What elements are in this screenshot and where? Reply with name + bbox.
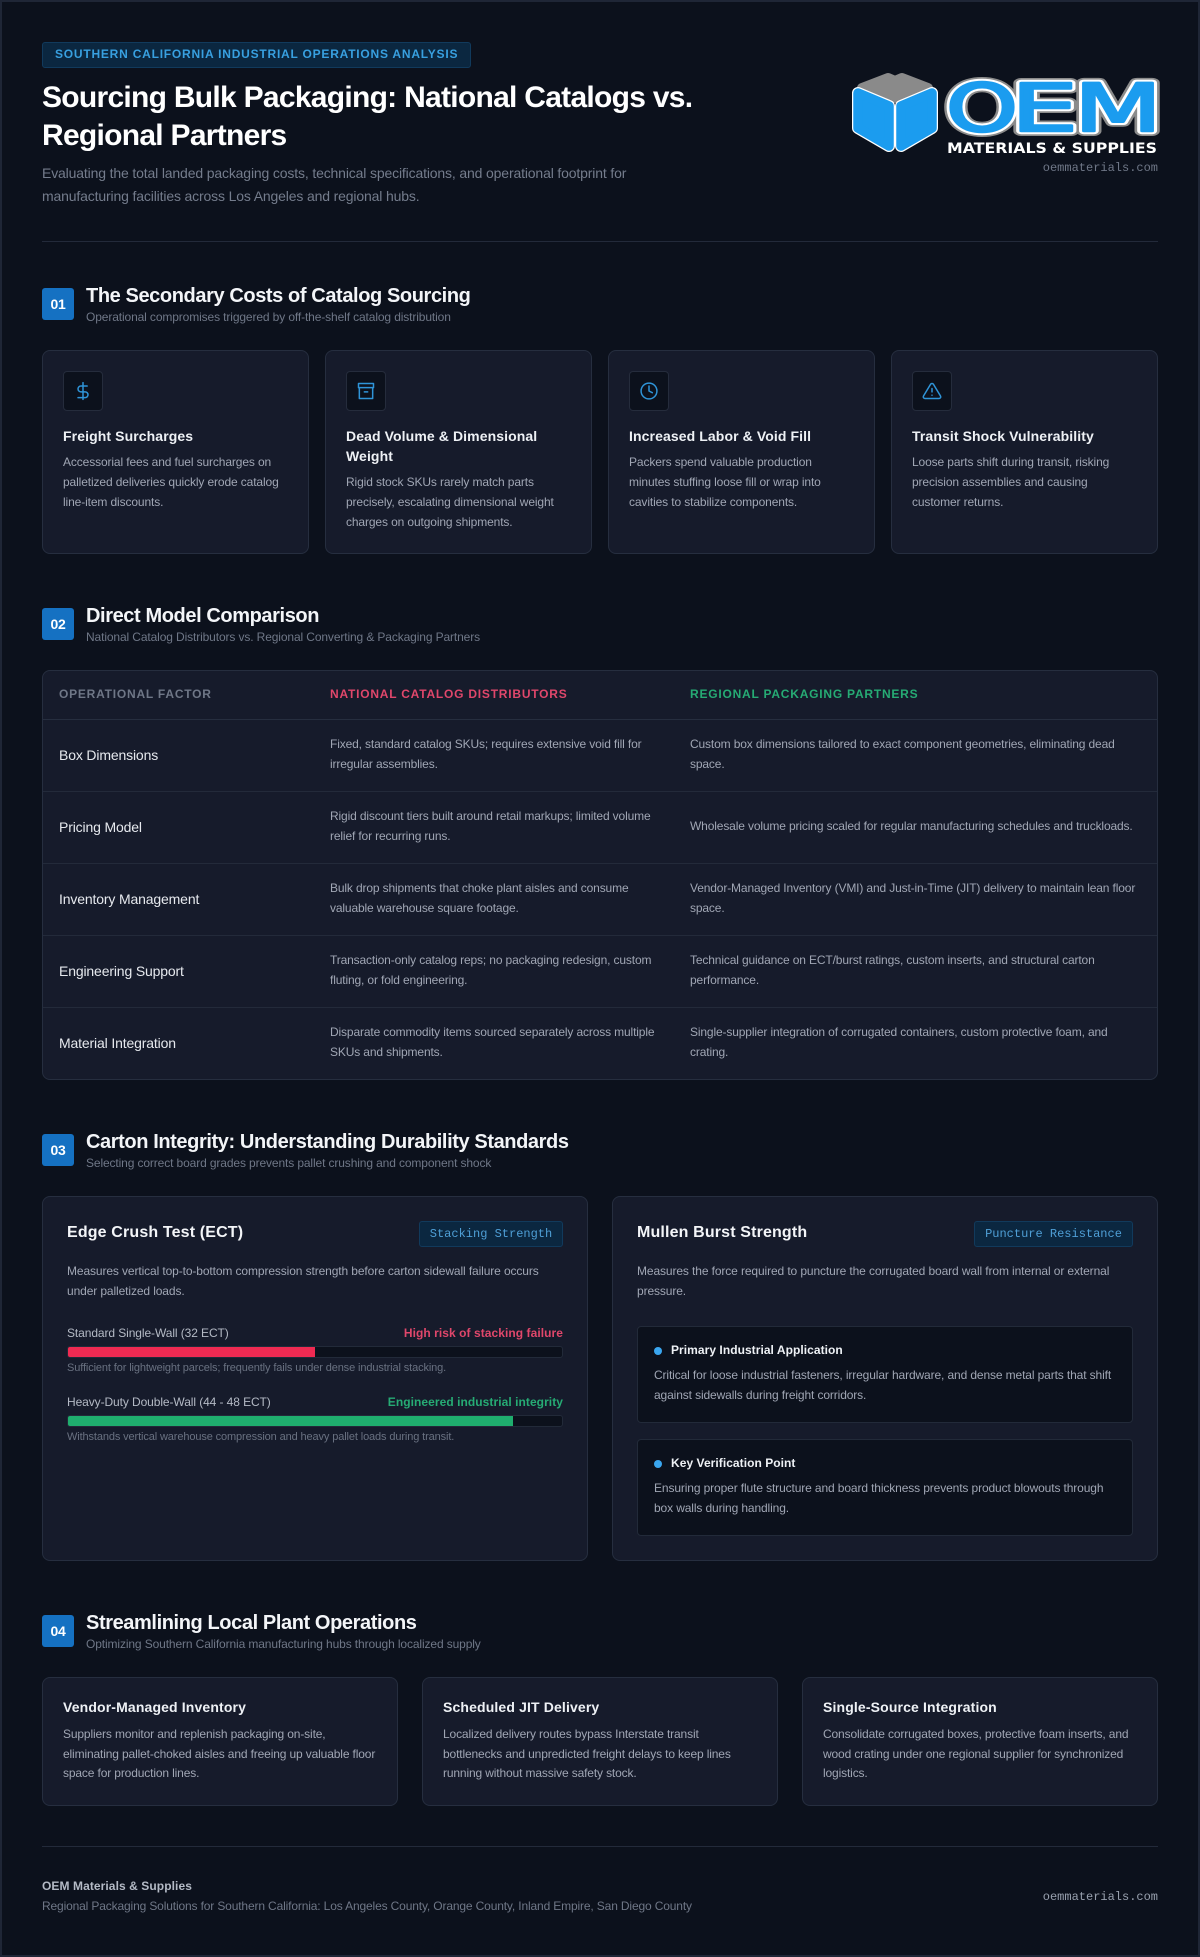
tag: stacking strength: Stacking Strength [430,1227,552,1241]
panel: mullen burst strength: Measures the force required to puncture the corrugated board wall from internal or external [637,1264,1109,1278]
row: material integration: Disparate commodity items sourced separately across multiple [330,1025,654,1039]
row: engineering support: Engineering Support [59,963,184,979]
callout: key verification point [637,1439,1133,1536]
logo wordmark [946,70,1162,147]
section 04 heading [42,1612,481,1651]
panel: edge crush test: under palletized loads. [67,1284,185,1298]
subtitle: Evaluating the total landed packaging costs, technical specifications, and operational footprint for [42,165,626,181]
row: material integration: Single-supplier integration of corrugated containers, custom protective foam, and [690,1025,1108,1039]
panel: transit shock: customer returns. [912,495,1003,509]
footer company: OEM Materials & Supplies [42,1879,192,1893]
panel: dead volume [325,350,592,554]
callout: primary application: Critical for loose industrial fasteners, irregular hardware, and dense metal parts that shift [654,1368,1111,1382]
footer url: oemmaterials.com [1043,1890,1158,1904]
metric: standard single-wall: High risk of stacking failure [404,1326,563,1340]
callout: primary application [637,1326,1133,1423]
table header [43,671,1157,720]
logo wordmark: O [946,70,1018,147]
row: material integration: Material Integration [59,1035,176,1051]
panel: dead volume: Weight [346,448,393,464]
panel: freight surcharges: palletized deliveries quickly erode catalog [63,475,279,489]
panel: scheduled JIT delivery: Localized delivery routes bypass Interstate transit [443,1727,699,1741]
panel: single-source integration: logistics. [823,1766,868,1780]
metric: heavy-duty double-wall: Withstands vertical warehouse compression and heavy pallet loads during transit. [67,1431,454,1443]
icon: dollar [63,371,103,411]
row: material integration: crating. [690,1045,728,1059]
icon: box [858,78,932,146]
callout: primary application: Primary Industrial Application [671,1343,843,1357]
row: box dimensions: irregular assemblies. [330,757,438,771]
logo wordmark: E [1011,70,1078,147]
panel: transit shock: Transit Shock Vulnerability [912,428,1094,444]
row: box dimensions: Box Dimensions [59,747,158,763]
section 02 heading: Direct Model Comparison [86,605,319,627]
callout: key verification point: Ensuring proper flute structure and board thickness prevents product blowouts through [654,1481,1103,1495]
bar: 50 percent [67,1346,563,1358]
row: engineering support: Transaction-only catalog reps; no packaging redesign, custom [330,953,651,967]
panel: dead volume: Rigid stock SKUs rarely match parts [346,475,534,489]
panel: labor and void fill [608,350,875,554]
panel: single-source integration: Single-Source Integration [823,1699,997,1715]
tag: stacking strength [419,1221,563,1247]
row: inventory management: valuable warehouse square footage. [330,901,519,915]
title: Regional Partners [42,119,287,152]
table header: REGIONAL PACKAGING PARTNERS [690,687,918,701]
row: box dimensions [43,720,1157,792]
panel: labor and void fill: Packers spend valuable production [629,455,812,469]
row: pricing model: relief for recurring runs. [330,829,450,843]
section 02 heading: 02 [50,616,65,632]
row: box dimensions: Fixed, standard catalog SKUs; requires extensive void fill for [330,737,641,751]
logo wordmark: E [1011,70,1078,147]
panel: freight surcharges: line-item discounts. [63,495,163,509]
panel: labor and void fill: cavities to stabilize components. [629,495,797,509]
logo tagline: MATERIALS & SUPPLIES [947,141,1157,157]
icon: box [346,371,386,411]
row: pricing model: Wholesale volume pricing scaled for regular manufacturing schedules and truckloads. [690,819,1133,833]
logo wordmark: M [1074,70,1162,147]
section 02 heading [42,605,480,644]
table header: OPERATIONAL FACTOR [59,687,212,701]
title [42,81,692,152]
logo wordmark: M [1074,70,1162,147]
panel: mullen burst strength [612,1196,1158,1561]
row: engineering support: performance. [690,973,759,987]
logo wordmark: M [1074,70,1162,147]
footer [42,1846,1158,1916]
category badge: SOUTHERN CALIFORNIA INDUSTRIAL OPERATIONS ANALYSIS [55,47,458,61]
section 03 heading: Selecting correct board grades prevents pallet crushing and component shock [86,1156,491,1170]
section 03 heading [42,1131,569,1170]
metric: standard single-wall [67,1326,563,1374]
row: inventory management: Inventory Management [59,891,199,907]
tag: puncture resistance [974,1221,1133,1247]
metric: heavy-duty double-wall: Engineered industrial integrity [388,1395,563,1409]
row: pricing model: Pricing Model [59,819,142,835]
logo: OEM Materials & Supplies [852,70,1162,157]
row: engineering support: Technical guidance on ECT/burst ratings, custom inserts, and structural carton [690,953,1095,967]
comparison table [42,670,1158,1080]
logo wordmark: O [946,70,1018,147]
logo wordmark: O [946,70,1018,147]
subtitle: manufacturing facilities across Los Angeles and regional hubs. [42,188,420,204]
row: material integration [59,1025,1108,1059]
panel: edge crush test [42,1196,588,1561]
section 01 heading [42,285,470,324]
metric: heavy-duty double-wall: Heavy-Duty Double-Wall (44 - 48 ECT) [67,1395,271,1409]
row: material integration: SKUs and shipments. [330,1045,443,1059]
section 02 heading: National Catalog Distributors vs. Regional Converting & Packaging Partners [86,630,480,644]
row: inventory management: space. [690,901,725,915]
panel: scheduled JIT delivery: running without massive safety stock. [443,1766,637,1780]
section 01 heading: The Secondary Costs of Catalog Sourcing [86,285,470,307]
title: Sourcing Bulk Packaging: National Catalogs vs. [42,81,692,114]
row: box dimensions: space. [690,757,725,771]
panel: vendor-managed inventory [42,1677,398,1806]
callout: primary application: against sidewalls during freight corridors. [654,1388,866,1402]
row: engineering support [43,936,1157,1008]
section 03 heading: Carton Integrity: Understanding Durability Standards [86,1131,569,1153]
panel: vendor-managed inventory: space for production lines. [63,1766,199,1780]
row: inventory management [43,864,1157,936]
section 04 heading: 04 [50,1623,65,1639]
metric: standard single-wall: Standard Single-Wall (32 ECT) [67,1326,229,1340]
panel: edge crush test: Measures vertical top-to-bottom compression strength before carton sidewall failure occurs [67,1264,539,1278]
panel: labor and void fill: minutes stuffing loose fill or wrap into [629,475,821,489]
panel: freight surcharges: Accessorial fees and fuel surcharges on [63,455,271,469]
panel: transit shock: Loose parts shift during transit, risking [912,455,1109,469]
table header: NATIONAL CATALOG DISTRIBUTORS [330,687,568,701]
panel: mullen burst strength: Mullen Burst Strength [637,1224,807,1241]
section 01 heading: Operational compromises triggered by off-the-shelf catalog distribution [86,310,451,324]
row: engineering support: fluting, or fold engineering. [330,973,467,987]
panel: dead volume: precisely, escalating dimensional weight [346,495,554,509]
panel: vendor-managed inventory: Suppliers monitor and replenish packaging on-site, [63,1727,326,1741]
category badge [42,42,471,68]
section 04 heading: Streamlining Local Plant Operations [86,1612,417,1634]
logo url: oemmaterials.com [1043,161,1158,175]
panel: single-source integration: wood crating under one regional supplier for synchronized [823,1747,1123,1761]
icon: clock [629,371,669,411]
row: box dimensions: Custom box dimensions tailored to exact component geometries, eliminating dead [690,737,1115,751]
tag: puncture resistance: Puncture Resistance [985,1227,1122,1241]
row: pricing model: Rigid discount tiers built around retail markups; limited volume [330,809,651,823]
panel: freight surcharges: Freight Surcharges [63,428,193,444]
footer regions: Regional Packaging Solutions for Southern California: Los Angeles County, Orange County, Inland Empire, San Diego County [42,1899,692,1913]
callout: key verification point: Key Verification Point [671,1456,795,1470]
panel: transit shock: precision assemblies and causing [912,475,1088,489]
panel: scheduled JIT delivery [422,1677,778,1806]
subtitle [42,165,626,204]
panel: transit shock [891,350,1158,554]
row: inventory management: Bulk drop shipments that choke plant aisles and consume [330,881,628,895]
panel: scheduled JIT delivery: bottlenecks and unpredicted freight delays to keep lines [443,1747,731,1761]
panel: labor and void fill: Increased Labor & Void Fill [629,428,811,444]
metric: standard single-wall: Sufficient for lightweight parcels; frequently fails under dense industrial stacking. [67,1362,446,1374]
row: pricing model [43,792,1157,864]
bar: 90 percent [67,1415,563,1427]
section 04 heading: Optimizing Southern California manufacturing hubs through localized supply [86,1637,481,1651]
icon: warning [912,371,952,411]
callout: key verification point: box walls during handling. [654,1501,789,1515]
panel: freight surcharges [42,350,309,554]
logo wordmark: E [1011,70,1078,147]
row: inventory management: Vendor-Managed Inventory (VMI) and Just-in-Time (JIT) delivery to maintain lean floor [690,881,1135,895]
panel: dead volume: Dead Volume & Dimensional [346,428,537,444]
section 03 heading: 03 [50,1142,65,1158]
panel: vendor-managed inventory: Vendor-Managed Inventory [63,1699,246,1715]
panel: single-source integration [802,1677,1158,1806]
metric: heavy-duty double-wall [67,1395,563,1443]
section 01 heading: 01 [50,296,65,312]
panel: dead volume: charges on outgoing shipments. [346,515,513,529]
panel: edge crush test: Edge Crush Test (ECT) [67,1224,243,1241]
panel: scheduled JIT delivery: Scheduled JIT Delivery [443,1699,599,1715]
panel: vendor-managed inventory: eliminating pallet-choked aisles and freeing up valuable floor [63,1747,375,1761]
panel: single-source integration: Consolidate corrugated boxes, protective foam inserts, and [823,1727,1128,1741]
panel: mullen burst strength: pressure. [637,1284,686,1298]
